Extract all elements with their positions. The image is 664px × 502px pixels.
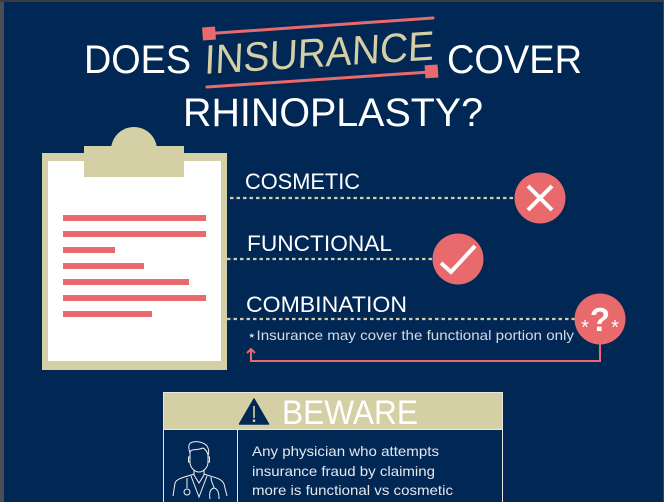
beware header bbox=[164, 393, 502, 432]
icon: doctor bbox=[173, 442, 227, 499]
icon: warning triangle bbox=[240, 399, 268, 424]
icon: question mark: * bbox=[611, 317, 619, 339]
label: cosmetic: COSMETIC bbox=[245, 169, 360, 194]
title word: cover: COVER bbox=[447, 38, 582, 82]
red line above insurance bbox=[202, 18, 433, 40]
label: functional: FUNCTIONAL bbox=[247, 231, 392, 256]
panel: beware bbox=[164, 392, 502, 502]
beware text: insurance fraud by claiming bbox=[252, 463, 435, 479]
beware text: Any physician who attempts bbox=[252, 443, 439, 459]
icon: question mark: ? bbox=[590, 301, 610, 338]
title word: does: DOES bbox=[84, 38, 191, 82]
title bbox=[84, 18, 582, 135]
clipboard clip bbox=[84, 127, 184, 177]
row: cosmetic bbox=[230, 169, 566, 224]
row: combination bbox=[227, 292, 626, 361]
row: functional bbox=[227, 231, 484, 284]
icon: question mark bbox=[574, 294, 626, 344]
footnote: ⋆Insurance may cover the functional portion only bbox=[247, 327, 574, 343]
beware text bbox=[252, 443, 453, 498]
beware text: more is functional vs cosmetic bbox=[252, 482, 453, 498]
clipboard text lines bbox=[63, 215, 206, 317]
icon: clipboard bbox=[42, 127, 227, 370]
highlighted word: insurance: INSURANCE bbox=[204, 22, 435, 83]
title line two: RHINOPLASTY? bbox=[183, 91, 483, 135]
icon: cross bbox=[514, 172, 566, 224]
arrow: footnote pointer bbox=[247, 342, 600, 361]
icon: check bbox=[432, 234, 484, 284]
icon: question mark: * bbox=[581, 317, 589, 339]
red line below insurance bbox=[207, 65, 438, 87]
label: combination: COMBINATION bbox=[246, 292, 407, 317]
beware heading: BEWARE bbox=[282, 394, 418, 432]
